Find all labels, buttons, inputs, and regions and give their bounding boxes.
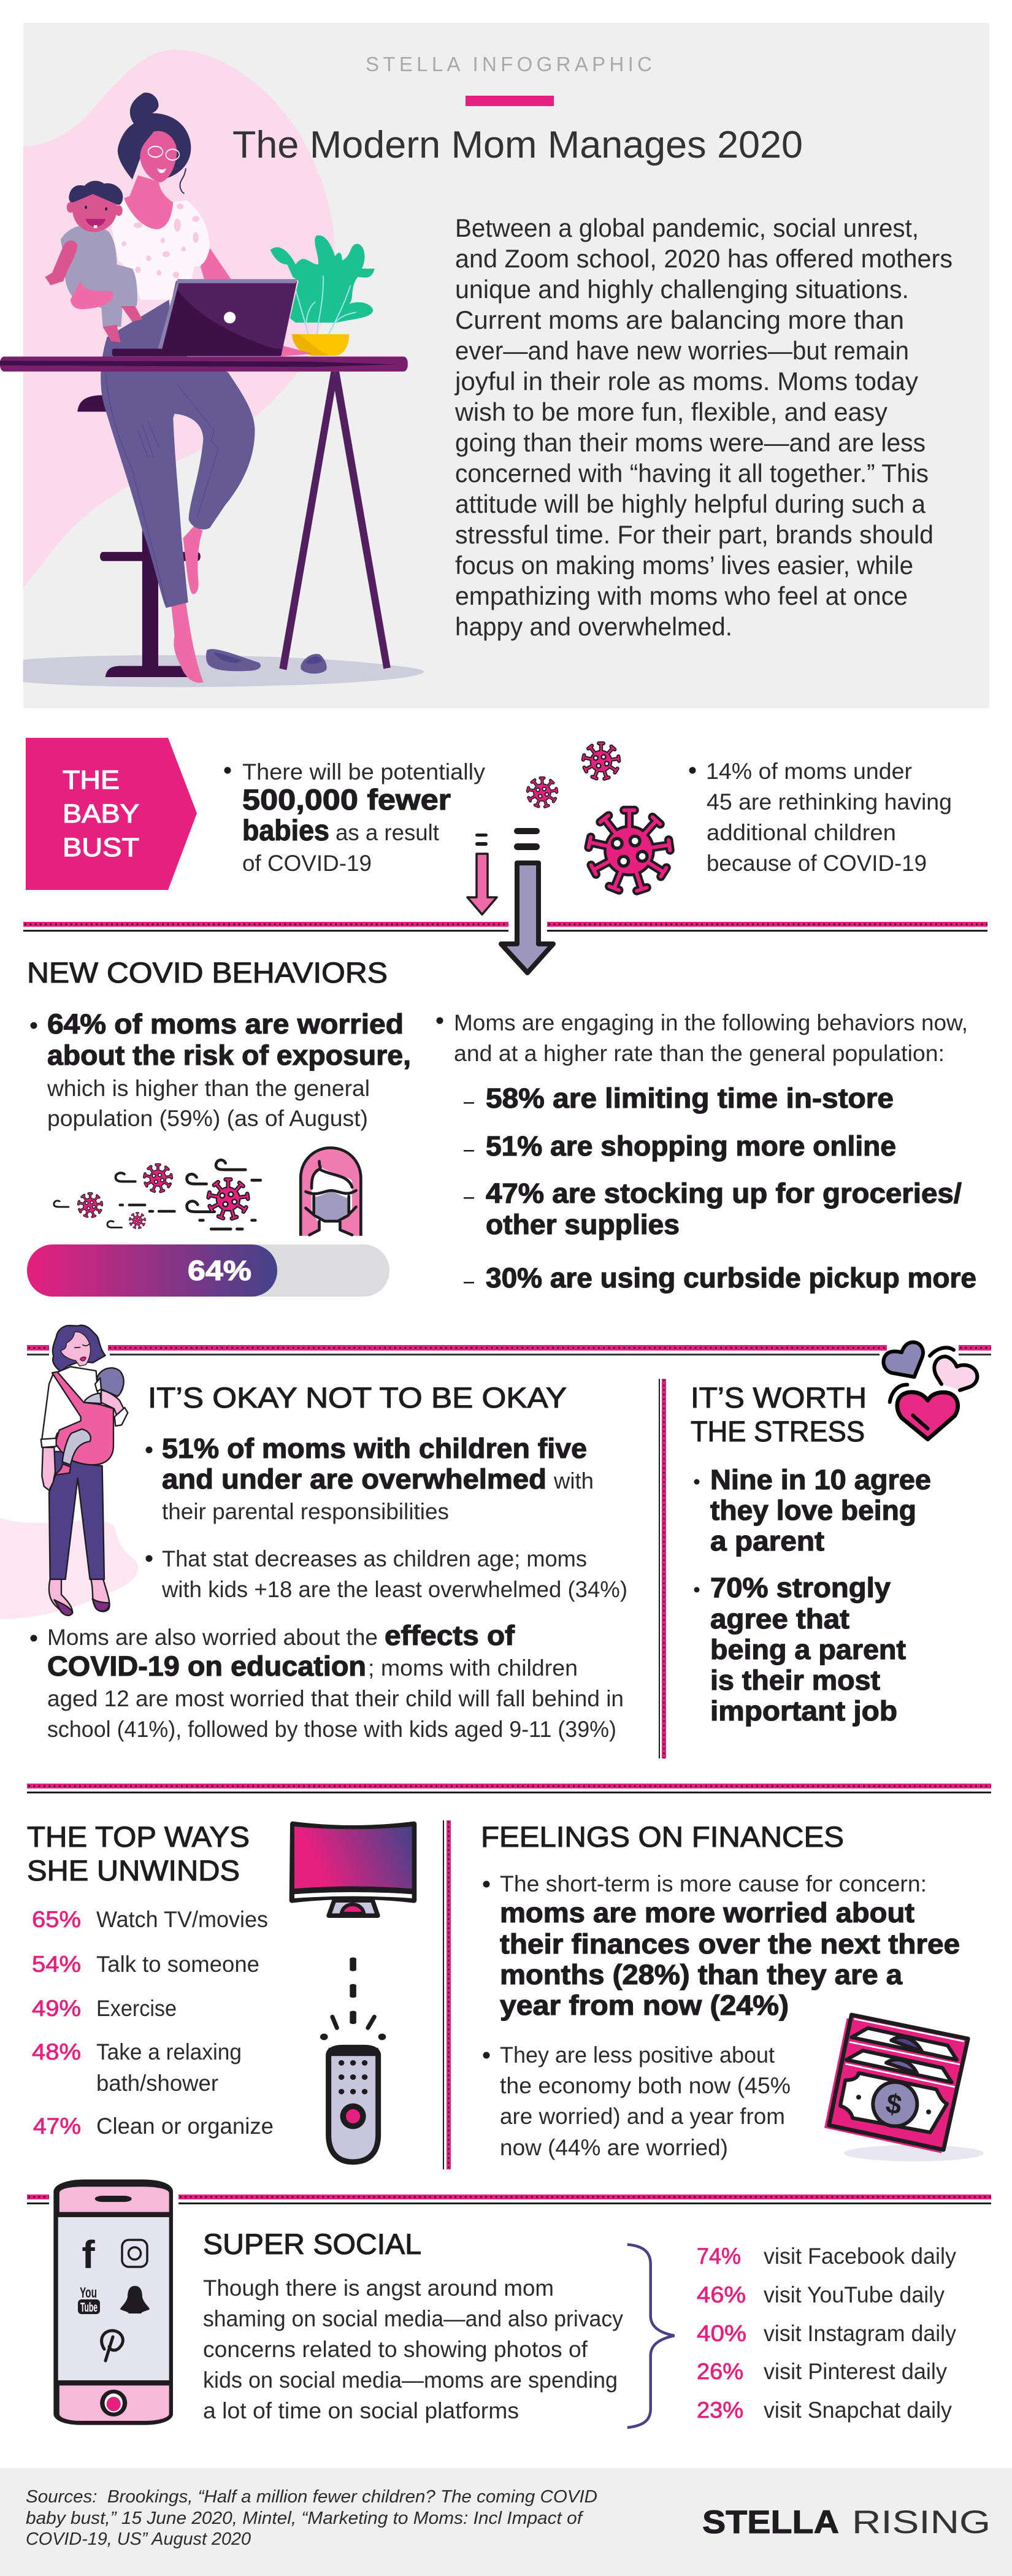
text: short-term concern: The short-term is more cause for concern:: [500, 1871, 927, 1896]
plant: [270, 236, 375, 323]
glasses: [148, 147, 179, 160]
divider: section 4 top: [27, 1784, 991, 1793]
text: short-term concern: year from now (24%): [500, 1990, 789, 2021]
sources: Sources: Brookings, “Half a million fewer children? The coming COVID: [26, 2487, 597, 2507]
text: nine in 10: [694, 1464, 931, 1557]
hair strand: [180, 168, 186, 193]
text: 500,000 fewer babies: as a result: [335, 820, 440, 845]
icon: money: [824, 2015, 984, 2161]
text: 51% overwhelmed: and under are overwhelmed: [162, 1463, 546, 1495]
sources: [26, 2487, 597, 2549]
list: social platform stats: visit Instagram daily: [764, 2321, 956, 2346]
intro paragraph: Current moms are balancing more than: [455, 305, 904, 334]
face: [140, 131, 177, 182]
heading: it's okay not to be okay: IT’S OKAY NOT TO BE OKAY: [148, 1381, 567, 1414]
text: behaviors intro: Moms are engaging in the following behaviors now,: [454, 1010, 968, 1035]
vertical divider: [443, 1820, 451, 2169]
sources: baby bust,” 15 June 2020, Mintel, “Marketing to Moms: Incl Impact of: [26, 2509, 584, 2528]
plant stems: [296, 276, 356, 335]
arrow: small pink down: [467, 834, 497, 914]
text: 14% of moms rethinking: [689, 759, 952, 876]
brace: [627, 2245, 675, 2428]
intro paragraph: joyful in their role as moms. Moms today: [454, 367, 918, 396]
list: unwind stats: Watch TV/movies: [96, 1907, 268, 1932]
footer background: [0, 2468, 1012, 2576]
vertical divider: [659, 1379, 666, 1758]
text: 70% strongly agree: being a parent: [710, 1634, 906, 1665]
intro paragraph: Between a global pandemic, social unrest,: [455, 213, 919, 242]
text: 64% worried: population (59%) (as of August): [47, 1106, 368, 1131]
illustration: mom with baby at desk: [0, 50, 424, 687]
text: behaviors intro: and at a higher rate than the general population:: [454, 1041, 945, 1066]
banner: the baby bust: BABY: [63, 799, 139, 829]
divider left: [23, 922, 508, 932]
intro paragraph: [454, 213, 953, 641]
list: behaviors: [464, 1083, 976, 1294]
text: less positive about economy: now (44% are worried): [500, 2135, 728, 2160]
divider: section 5 top: [27, 2195, 991, 2204]
shoes: [206, 649, 327, 673]
divider: section 3 top: [27, 1345, 991, 1355]
intro paragraph: empathizing with moms who feel at once: [455, 581, 908, 610]
list: unwind stats: 49%: [32, 1996, 81, 2021]
text: short-term concern: their finances over the next three: [500, 1928, 960, 1960]
intro paragraph: and Zoom school, 2020 has offered mothers: [455, 244, 953, 273]
progress bar 64%: 64%: [188, 1255, 251, 1286]
list: behaviors: 47% are stocking up for groceries/: [486, 1178, 962, 1209]
text: 64% worried: which is higher than the general: [47, 1076, 370, 1101]
icon: viruses in wind: [54, 1160, 261, 1229]
desk legs: [279, 372, 391, 670]
intro paragraph: wish to be more fun, flexible, and easy: [454, 397, 887, 426]
list: behaviors: 58% are limiting time in-store: [486, 1083, 894, 1114]
icon: phone with social logos: [53, 2179, 173, 2425]
text: 500,000 fewer babies: of COVID-19: [242, 851, 372, 876]
text: 500,000 fewer babies: 500,000 fewer: [242, 783, 451, 816]
text: nine in 10: they love being: [710, 1495, 916, 1526]
mother's hand: [71, 281, 113, 309]
list: social platform stats: 23%: [697, 2398, 743, 2423]
floor shadow: [23, 655, 424, 687]
text: 14% of moms rethinking: 45 are rethinking having: [707, 789, 952, 815]
panel: hero background: [23, 23, 989, 708]
list: social platform stats: visit Pinterest daily: [764, 2359, 947, 2384]
list: unwind stats: Talk to someone: [96, 1952, 259, 1977]
intro paragraph: focus on making moms’ lives easier, while: [455, 551, 913, 580]
list: social platform stats: 74%: [697, 2244, 741, 2269]
list: social platform stats: [697, 2244, 956, 2423]
baby feet: [103, 306, 142, 342]
list: unwind stats: 65%: [32, 1907, 81, 1932]
heading: the top ways she unwinds: SHE UNWINDS: [27, 1854, 240, 1887]
hand on desk: [280, 345, 313, 356]
icon: phone with social logos: You: [80, 2285, 97, 2301]
text: stat decreases: That stat decreases as children age; moms: [162, 1546, 587, 1571]
text: stat decreases: with kids +18 are the least overwhelmed (34%): [161, 1577, 627, 1602]
text: stat decreases: [146, 1546, 627, 1602]
pink blob: [23, 50, 334, 588]
list: unwind stats: Take a relaxing: [96, 2039, 242, 2064]
text: 70% strongly agree: important job: [710, 1695, 897, 1727]
list: social platform stats: 40%: [697, 2321, 746, 2346]
banner: the baby bust: BUST: [63, 833, 139, 862]
illustration: tired mom with baby carrier: [0, 1325, 138, 1619]
standing foot: [171, 602, 203, 683]
intro paragraph: attitude will be highly helpful during such a: [455, 489, 926, 518]
text: less positive about economy: [483, 2042, 791, 2160]
text: 70% strongly agree: agree that: [710, 1603, 849, 1635]
pants: [101, 300, 255, 608]
baby onesie: [61, 225, 137, 327]
heading: it's worth the stress: [691, 1381, 867, 1447]
icon: phone with social logos: Tube: [80, 2301, 98, 2315]
text: effects on education: Moms are also worried about the: [47, 1625, 378, 1650]
logo: stella rising: [702, 2504, 991, 2540]
icon: small virus middle: [527, 778, 557, 807]
list: unwind stats: bath/shower: [96, 2071, 218, 2096]
list: unwind stats: 47%: [33, 2114, 81, 2139]
text: super social paragraph: concerns related to showing photos of: [203, 2337, 588, 2362]
text: less positive about economy: the economy both now (45%: [500, 2073, 791, 2098]
banner: the baby bust: [26, 738, 197, 890]
neck: [124, 175, 173, 229]
list: social platform stats: visit Facebook daily: [764, 2244, 956, 2269]
text: 51% overwhelmed: with: [553, 1468, 594, 1493]
icon: television: [292, 1824, 414, 1915]
icon: small virus top: [583, 743, 619, 779]
text: behaviors intro: [437, 1010, 968, 1066]
progress bar 64%: [27, 1244, 389, 1297]
divider right: [547, 922, 987, 932]
list: unwind stats: 48%: [32, 2039, 81, 2064]
baby eyes: [85, 205, 107, 228]
text: super social paragraph: a lot of time on social platforms: [203, 2398, 519, 2423]
text: 51% overwhelmed: [146, 1433, 594, 1524]
text: 51% overwhelmed: 51% of moms with children five: [162, 1433, 587, 1464]
text: short-term concern: months (28%) than they are a: [500, 1959, 903, 1990]
icon: woman with mask: [301, 1148, 361, 1236]
logo: stella rising: STELLA: [702, 2504, 839, 2540]
text: 64% worried: 64% of moms are worried: [47, 1008, 404, 1040]
heading: the top ways she unwinds: [27, 1820, 250, 1887]
stool: [77, 395, 201, 677]
text: effects on education: [31, 1620, 624, 1742]
icon: large virus: [589, 810, 670, 891]
text: super social paragraph: [203, 2275, 623, 2423]
pink accent bar: [466, 96, 554, 106]
text: 64% worried: about the risk of exposure,: [47, 1040, 411, 1071]
baby head: [67, 194, 123, 232]
text: 500,000 fewer babies: babies: [242, 814, 329, 846]
icon: phone with social logos: f: [82, 2233, 95, 2277]
list: behaviors: other supplies: [486, 1209, 680, 1240]
text: 500,000 fewer babies: [224, 759, 486, 876]
icon: hearts: [883, 1342, 977, 1439]
list: unwind stats: Exercise: [96, 1996, 177, 2021]
intro paragraph: happy and overwhelmed.: [455, 612, 732, 641]
heading: it's worth the stress: IT’S WORTH: [691, 1381, 867, 1414]
sources: COVID-19, US” August 2020: [26, 2529, 251, 2549]
text: 70% strongly agree: 70% strongly: [710, 1572, 891, 1603]
list: unwind stats: 54%: [32, 1952, 81, 1977]
arm: [201, 248, 231, 279]
list: behaviors: 51% are shopping more online: [486, 1130, 896, 1162]
list: social platform stats: visit YouTube daily: [764, 2282, 945, 2307]
list: social platform stats: visit Snapchat daily: [764, 2398, 952, 2423]
text: super social paragraph: shaming on social media—and also privacy: [203, 2306, 623, 2331]
intro paragraph: going than their moms were—and are less: [455, 428, 926, 457]
text: effects on education: aged 12 are most worried that their child will fall behind in: [47, 1686, 624, 1711]
text: less positive about economy: They are less positive about: [500, 2042, 775, 2068]
desk top: [0, 356, 408, 372]
text: effects on education: effects of: [385, 1620, 515, 1651]
text: 14% of moms rethinking: because of COVID-19: [707, 851, 927, 876]
arrow: large purple down: [501, 828, 553, 973]
text: super social paragraph: Though there is angst around mom: [203, 2275, 554, 2301]
title: The Modern Mom Manages 2020: [232, 124, 803, 166]
heading: super social: SUPER SOCIAL: [203, 2228, 421, 2260]
label: stella infographic: STELLA INFOGRAPHIC: [366, 53, 652, 75]
heading: the top ways she unwinds: THE TOP WAYS: [27, 1820, 250, 1853]
list: behaviors: 30% are using curbside pickup more: [486, 1262, 976, 1294]
text: 51% overwhelmed: their parental responsibilities: [162, 1499, 449, 1524]
heading: new covid behaviors: NEW COVID BEHAVIORS: [27, 956, 388, 989]
text: short-term concern: moms are more worried about: [500, 1897, 914, 1928]
list: unwind stats: [32, 1907, 274, 2139]
text: 14% of moms rethinking: additional children: [707, 820, 896, 845]
hair: [118, 93, 191, 180]
text: 64% worried: [31, 1008, 411, 1131]
icon: remote control: [320, 1957, 386, 2162]
text: effects on education: COVID-19 on education: [47, 1650, 366, 1682]
laptop: [112, 279, 297, 356]
text: 70% strongly agree: is their most: [710, 1665, 880, 1696]
list: unwind stats: Clean or organize: [96, 2114, 274, 2139]
intro paragraph: unique and highly challenging situations.: [455, 275, 909, 304]
list: social platform stats: 26%: [697, 2359, 743, 2384]
baby arm: [45, 240, 77, 285]
shirt dots: [121, 204, 199, 278]
plant pot: [292, 334, 349, 356]
raised foot: [183, 526, 203, 594]
list: social platform stats: 46%: [697, 2282, 746, 2307]
intro paragraph: stressful time. For their part, brands should: [455, 520, 933, 549]
text: 500,000 fewer babies: There will be potentially: [242, 759, 486, 784]
logo: stella rising: RISING: [852, 2504, 991, 2540]
intro paragraph: concerned with “having it all together.” This: [455, 459, 929, 488]
text: super social paragraph: kids on social media—moms are spending: [203, 2367, 618, 2393]
text: effects on education: school (41%), followed by those with kids aged 9-11 (39%): [47, 1717, 616, 1742]
baby mouth: [85, 219, 105, 227]
text: nine in 10: Nine in 10 agree: [710, 1464, 931, 1495]
pants creases: [105, 372, 218, 605]
heading: feelings on finances: FEELINGS ON FINANCES: [481, 1820, 844, 1853]
heading: it's worth the stress: THE STRESS: [691, 1415, 865, 1447]
text: effects on education: ; moms with children: [368, 1655, 578, 1681]
text: short-term concern: [483, 1871, 960, 2021]
text: nine in 10: a parent: [710, 1525, 824, 1557]
baby hair: [69, 181, 123, 205]
mouth: [157, 168, 166, 173]
text: 70% strongly agree: [694, 1572, 906, 1727]
text: less positive about economy: are worried) and a year from: [500, 2104, 785, 2129]
text: 14% of moms rethinking: 14% of moms under: [706, 759, 912, 784]
intro paragraph: ever—and have new worries—but remain: [455, 336, 909, 365]
shirt: [111, 198, 210, 300]
pot shadow: [292, 334, 329, 356]
icon: money: $: [884, 2087, 904, 2121]
banner: the baby bust: THE: [63, 765, 120, 795]
